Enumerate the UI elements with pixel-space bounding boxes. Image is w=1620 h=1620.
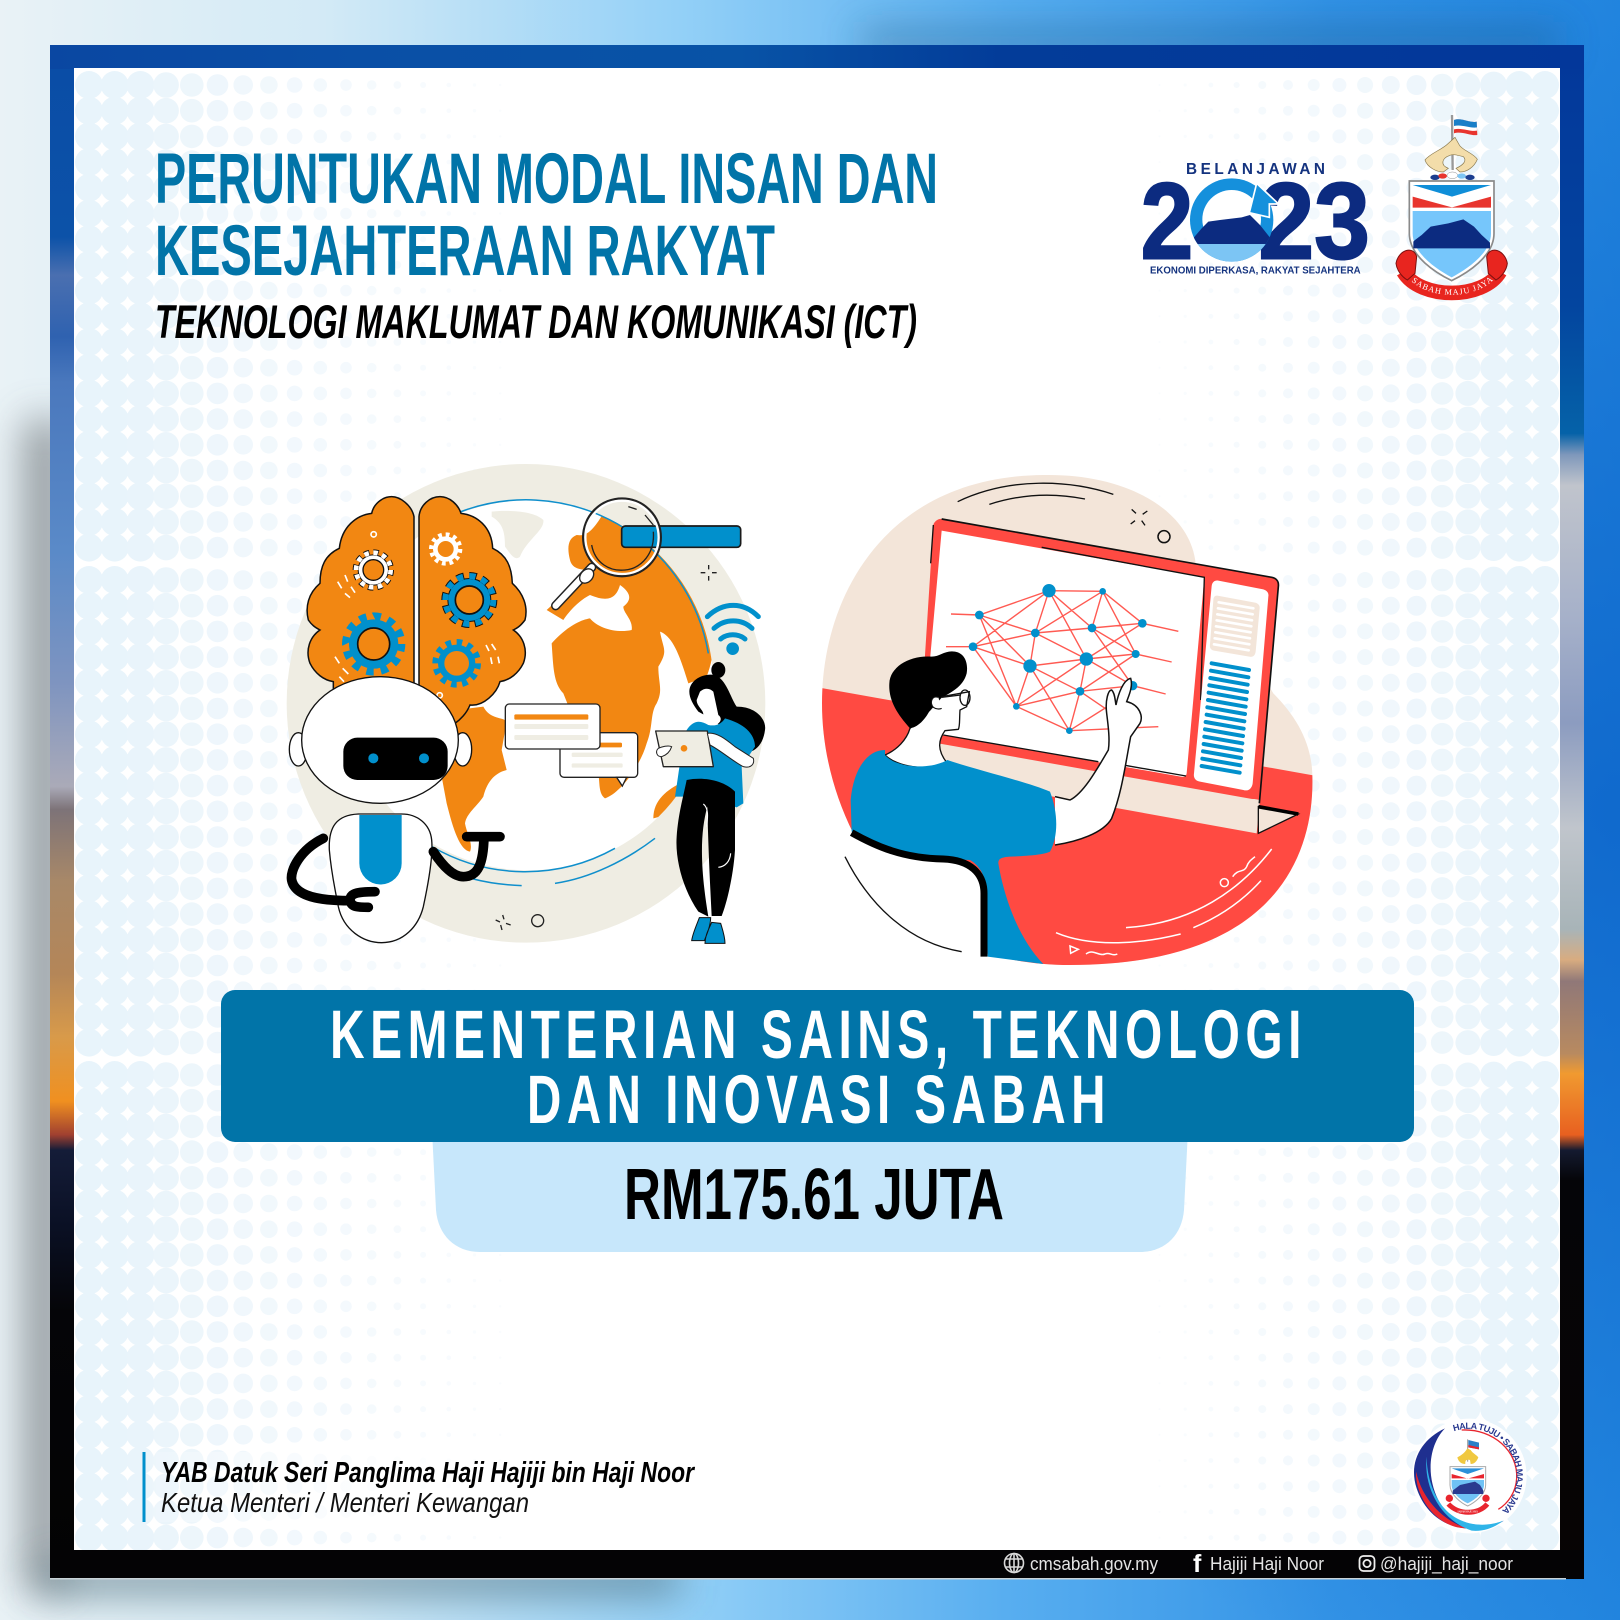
decorative lines top	[958, 483, 1147, 525]
footer social links	[1004, 1550, 1513, 1578]
beige circle background	[287, 464, 765, 943]
roundel logo: Hala Tuju: SABAH MAJU JAYA	[1457, 1510, 1478, 1513]
website: cmsabah.gov.my	[1030, 1554, 1158, 1574]
chief minister credit	[142, 1452, 695, 1522]
gears	[335, 532, 499, 698]
ministry banner	[221, 990, 1414, 1252]
robot	[289, 677, 500, 943]
logo: Belanjawan 2023: BELANJAWAN	[1186, 161, 1325, 178]
brain	[307, 497, 526, 723]
man	[851, 651, 1141, 964]
logo: Belanjawan 2023	[1141, 161, 1370, 283]
illustration: man touching neural network screen	[822, 475, 1312, 965]
logo: Belanjawan 2023: EKONOMI DIPERKASA, RAKYAT SEJAHTERA	[1150, 265, 1361, 276]
light blue amount tab	[432, 1130, 1188, 1252]
wifi icon	[707, 605, 758, 653]
instagram handle: @hajiji_haji_noor	[1380, 1554, 1513, 1575]
illustration: AI, robot and globe	[287, 464, 765, 943]
decorative white lines	[1056, 849, 1272, 955]
monitor	[920, 519, 1298, 833]
logo: Belanjawan 2023: 2	[1141, 162, 1193, 283]
chair	[842, 832, 985, 957]
icon: instagram	[1360, 1556, 1374, 1571]
subtitle: TEKNOLOGI MAKLUMAT DAN KOMUNIKASI (ICT)	[155, 295, 917, 348]
roundel logo: Hala Tuju: HALA TUJU • SABAH MAJU JAYA	[1452, 1422, 1523, 1513]
neural network	[946, 584, 1178, 734]
magnifying glass	[556, 499, 660, 606]
logo: Belanjawan 2023: 23	[1258, 162, 1370, 283]
backdrop blob	[822, 475, 1312, 965]
icon: facebook: f	[1193, 1550, 1202, 1578]
title: PERUNTUKAN MODAL INSAN DAN	[155, 140, 938, 219]
woman with tablet	[656, 662, 765, 943]
amount: RM175.61 JUTA	[624, 1155, 1004, 1235]
logo: Sabah coat of arms: SABAH MAJU JAYA	[1412, 278, 1494, 295]
globe	[386, 499, 712, 886]
title: KESEJAHTERAAN RAKYAT	[155, 212, 775, 291]
icon: globe	[1004, 1554, 1024, 1572]
chat bubbles	[505, 704, 638, 786]
sparkles and small circle	[496, 565, 717, 930]
chief minister credit: Ketua Menteri / Menteri Kewangan	[161, 1487, 529, 1518]
ministry banner: DAN INOVASI SABAH	[527, 1061, 1111, 1138]
roundel logo: Hala Tuju	[1412, 1418, 1526, 1534]
facebook name: Hajiji Haji Noor	[1210, 1554, 1324, 1574]
title	[155, 140, 938, 291]
blue band	[221, 990, 1414, 1142]
logo: Sabah coat of arms	[1396, 115, 1508, 300]
chief minister credit: YAB Datuk Seri Panglima Haji Hajiji bin Haji Noor	[161, 1457, 695, 1489]
search bar	[622, 526, 741, 547]
